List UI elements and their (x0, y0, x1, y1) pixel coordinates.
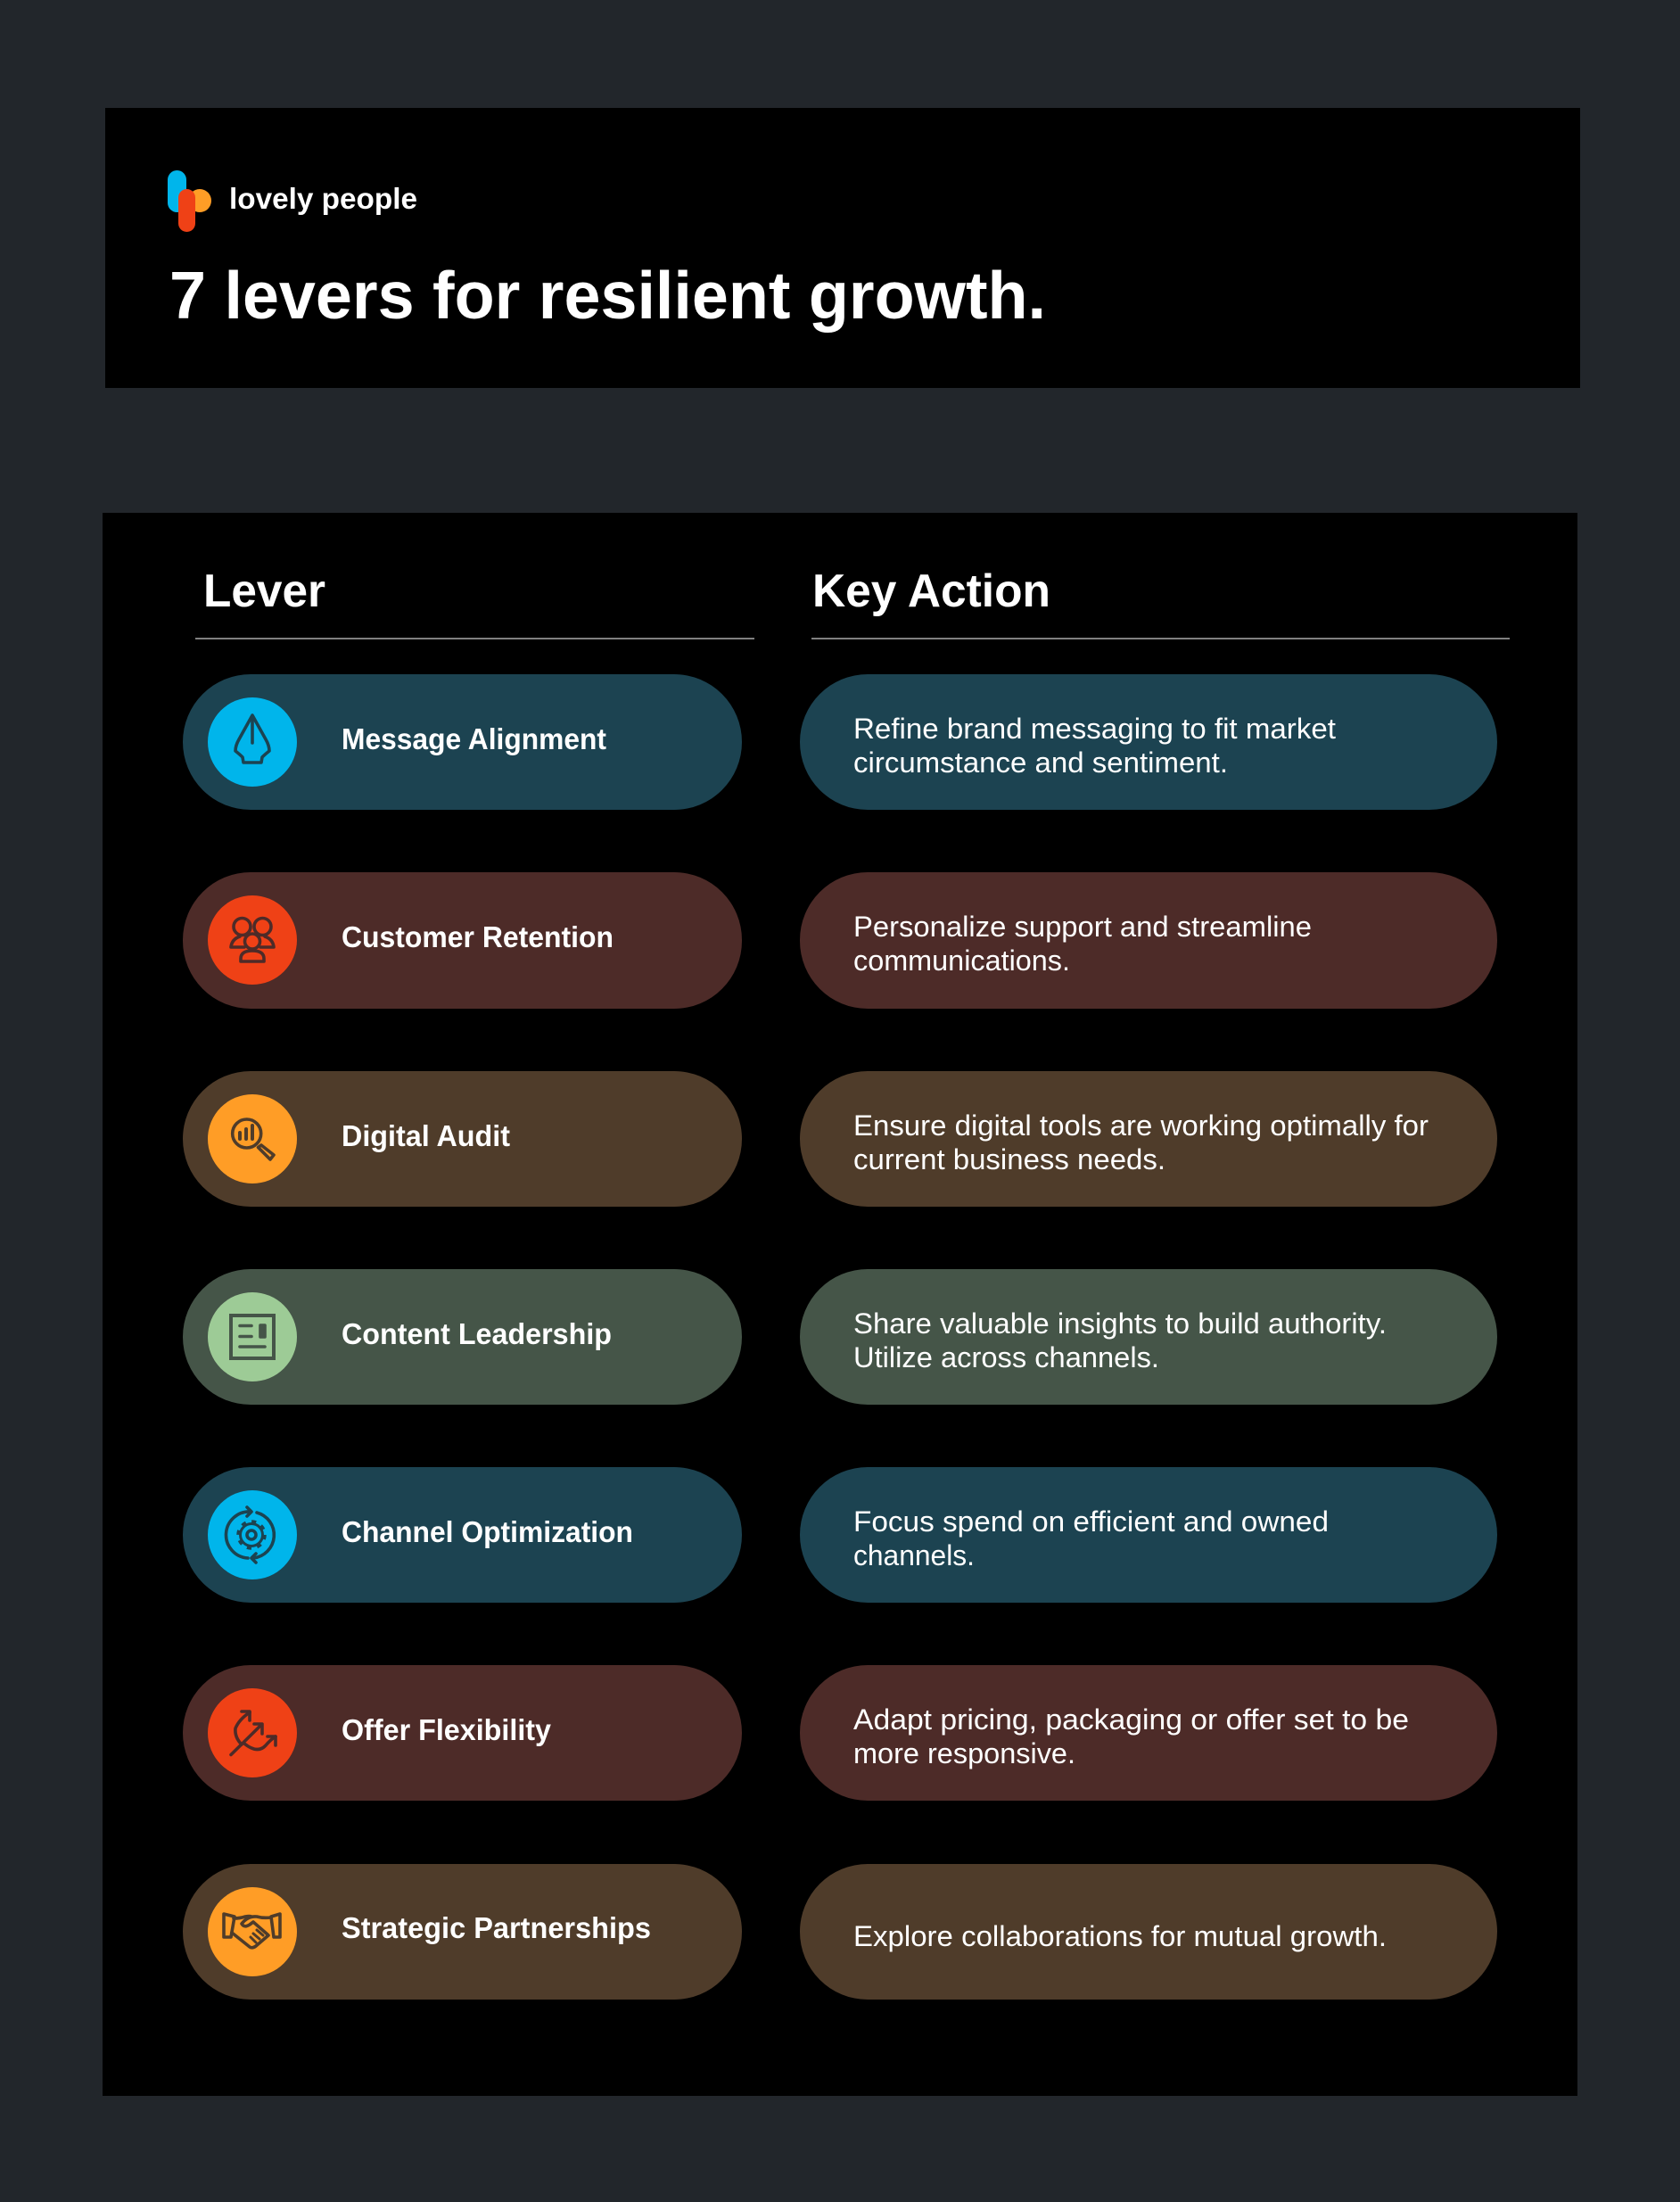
action pill: Content Leadership (800, 1269, 1497, 1405)
action pill: Offer Flexibility (800, 1665, 1497, 1801)
label: Channel Optimization: Channel Optimization (342, 1515, 633, 1548)
icon: magnifier with chart (208, 1094, 297, 1183)
row: Strategic Partnerships (183, 1864, 1497, 2000)
action pill: Customer Retention: Personalize support and streamline (853, 911, 1312, 943)
action pill: Message Alignment: Refine brand messaging to fit market (853, 713, 1336, 745)
action pill: Customer Retention (800, 872, 1497, 1009)
icon: handshake (208, 1887, 297, 1976)
label: Message Alignment: Message Alignment (342, 722, 606, 755)
label: Offer Flexibility: Offer Flexibility (342, 1713, 552, 1746)
title: 7 levers for resilient growth. (169, 258, 1046, 333)
action pill: Channel Optimization (800, 1467, 1497, 1603)
action pill: Strategic Partnerships (800, 1864, 1497, 2000)
label: Digital Audit: Digital Audit (342, 1119, 510, 1152)
action pill: Content Leadership: Share valuable insights to build authority. (853, 1307, 1387, 1340)
row: Customer Retention (183, 872, 1497, 1009)
action pill: Digital Audit (800, 1071, 1497, 1207)
action pill: Content Leadership: Utilize across channels. (853, 1341, 1159, 1373)
row: Channel Optimization (183, 1467, 1497, 1603)
action pill: Channel Optimization: Focus spend on efficient and owned (853, 1505, 1329, 1538)
row: Offer Flexibility (183, 1665, 1497, 1801)
action pill: Customer Retention: communications. (853, 944, 1070, 977)
label: Customer Retention: Customer Retention (342, 920, 614, 953)
logo wordmark: lovely people (229, 182, 417, 215)
icon: pen nib (208, 697, 297, 787)
panel: header (105, 108, 1580, 388)
action pill: Digital Audit: Ensure digital tools are working optimally for (853, 1109, 1429, 1142)
label: Strategic Partnerships: Strategic Partnerships (342, 1911, 651, 1944)
action pill: Message Alignment: circumstance and sentiment. (853, 746, 1228, 779)
heading: Key Action: Key Action (812, 565, 1050, 617)
logo (168, 170, 417, 232)
icon: article (208, 1292, 297, 1381)
row: Message Alignment (183, 674, 1497, 810)
action pill: Offer Flexibility: more responsive. (853, 1737, 1075, 1769)
logo mark (168, 170, 211, 232)
action pill: Offer Flexibility: Adapt pricing, packaging or offer set to be (853, 1703, 1409, 1736)
action pill: Message Alignment (800, 674, 1497, 810)
row: Digital Audit (183, 1071, 1497, 1207)
heading: Lever: Lever (203, 565, 325, 617)
action pill: Channel Optimization: channels. (853, 1539, 975, 1571)
panel: levers table (103, 513, 1577, 2096)
icon: gear with loop arrows (208, 1490, 297, 1579)
action pill: Digital Audit: current business needs. (853, 1143, 1165, 1175)
action pill: Strategic Partnerships: Explore collaborations for mutual growth. (853, 1920, 1387, 1952)
row: Content Leadership (183, 1269, 1497, 1405)
label: Content Leadership: Content Leadership (342, 1317, 612, 1350)
icon: people (208, 895, 297, 985)
icon: branching arrows (208, 1688, 297, 1777)
